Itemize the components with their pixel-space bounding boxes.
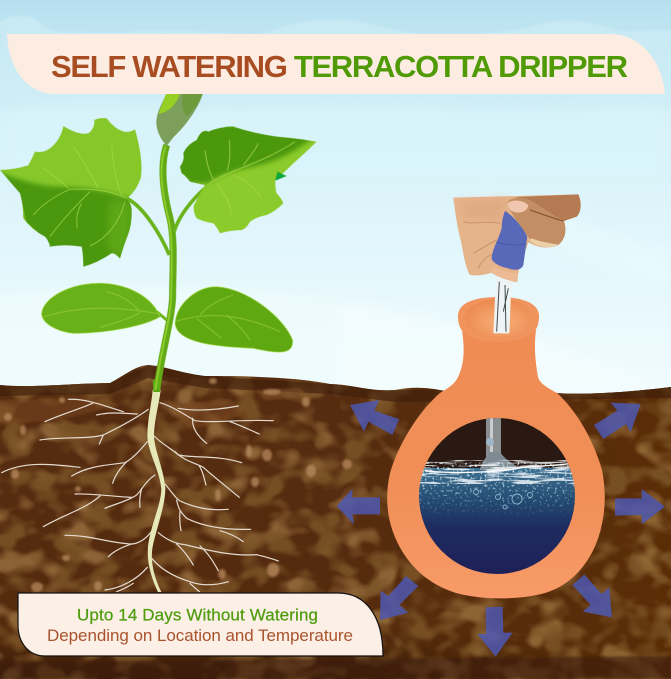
dripper cap — [492, 211, 527, 270]
flower bud — [156, 94, 203, 146]
title: SELF WATERING TERRACOTTA DRIPPER — [51, 49, 628, 84]
lower right leaf — [175, 287, 293, 352]
soil texture patches — [0, 388, 310, 430]
arrow: lower right — [572, 574, 612, 617]
petioles — [127, 198, 169, 255]
bubbles layer — [419, 462, 575, 516]
soil bottom shade — [0, 656, 671, 679]
sky background — [0, 0, 671, 400]
thumbnail — [508, 201, 528, 213]
soil ground — [0, 360, 671, 679]
title banner — [7, 34, 665, 94]
stem — [155, 145, 173, 390]
soil pebbles — [4, 378, 352, 592]
hand — [453, 194, 581, 282]
pot body — [387, 330, 605, 598]
water window — [419, 418, 575, 574]
water stream — [493, 278, 512, 333]
falling water — [486, 418, 501, 457]
arrow: lower left — [380, 576, 418, 620]
callout line 2: Depending on Location and Temperature — [47, 626, 353, 645]
arrow: left — [337, 489, 380, 524]
upper right leaf — [180, 126, 317, 234]
arrow: upper left — [350, 400, 399, 435]
index finger — [517, 194, 581, 221]
hand with blue dripper — [453, 194, 581, 333]
callout line 1: Upto 14 Days Without Watering — [77, 606, 318, 624]
thumb — [507, 198, 565, 247]
arrow: upper right — [594, 403, 641, 439]
root branches — [2, 399, 278, 592]
bubbles — [474, 490, 532, 509]
pot opening — [465, 299, 531, 337]
lower left leaf — [42, 283, 160, 333]
pot rim — [458, 297, 539, 342]
water surface — [419, 460, 575, 484]
leaf notch — [275, 172, 287, 181]
palm shading — [463, 222, 500, 268]
soil top band — [0, 365, 671, 402]
outflow arrows — [337, 400, 665, 657]
upper left leaf — [0, 118, 142, 267]
plant — [0, 94, 323, 390]
arrow: right — [615, 489, 665, 524]
plant roots — [2, 380, 278, 592]
terracotta pot — [387, 297, 605, 598]
arrow: down — [477, 607, 513, 657]
taproot — [147, 390, 165, 592]
callout — [18, 593, 383, 656]
